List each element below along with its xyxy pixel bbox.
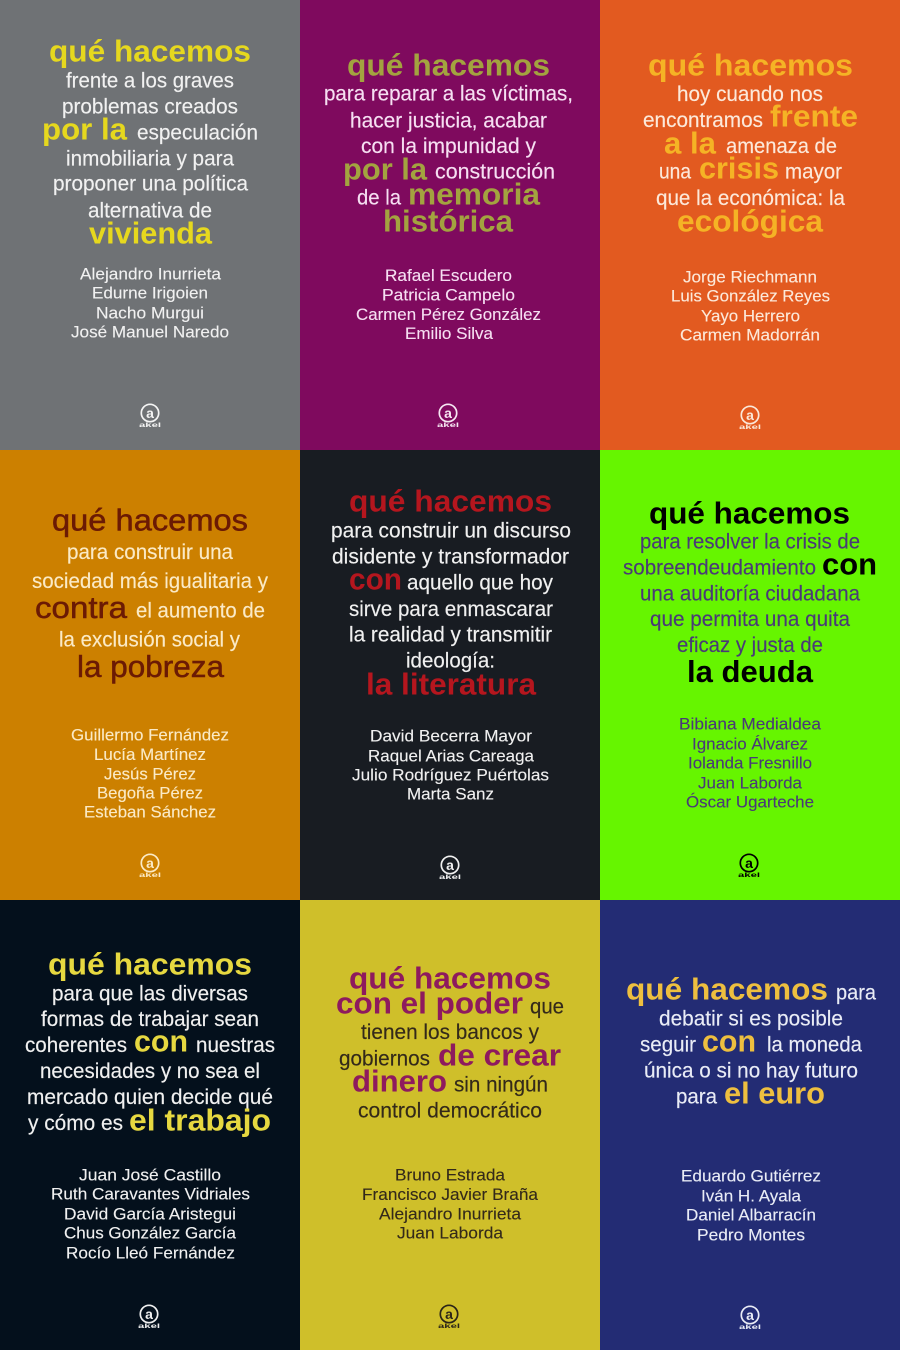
headline: qué hacemos frente a la crisis ecológica: una — [659, 161, 691, 184]
headline: qué hacemos contra la pobreza: qué hacemos — [52, 503, 248, 538]
authors: Guillermo Fernández — [71, 726, 229, 744]
authors: Rocío Lleó Fernández — [66, 1244, 235, 1262]
headline: qué hacemos por la vivienda: inmobiliaria y para — [66, 148, 234, 171]
headline: qué hacemos por la vivienda: proponer una política — [53, 173, 248, 196]
headline: qué hacemos con el trabajo: mercado quien decide qué — [27, 1086, 273, 1109]
headline: qué hacemos por la memoria histórica: construcción — [435, 161, 555, 184]
icon: akel logo: a — [146, 405, 154, 421]
headline: qué hacemos frente a la crisis ecológica — [643, 48, 858, 239]
headline: qué hacemos con la deuda: qué hacemos — [649, 496, 850, 531]
authors: Juan Laborda — [397, 1224, 504, 1242]
headline: qué hacemos por la memoria histórica: por la — [343, 152, 428, 187]
headline: qué hacemos con la deuda: eficaz y justa de — [677, 634, 823, 657]
panel: literatura cover — [300, 450, 600, 900]
headline: qué hacemos con el poder de crear dinero: de crear — [438, 1038, 561, 1073]
panel: euro cover — [600, 900, 900, 1350]
authors: Francisco Javier Braña — [362, 1186, 539, 1204]
headline: qué hacemos con el euro — [626, 972, 876, 1111]
authors: Rafael Escudero — [385, 267, 512, 285]
headline: qué hacemos frente a la crisis ecológica: que la económica: la — [656, 187, 845, 210]
headline: qué hacemos con la literatura: ideología: — [406, 650, 495, 673]
headline: qué hacemos frente a la crisis ecológica: encontramos — [643, 109, 763, 132]
authors: Pedro Montes — [697, 1226, 805, 1244]
headline: qué hacemos con el poder de crear dinero: qué hacemos — [349, 961, 551, 996]
authors: Edurne Irigoien — [92, 284, 208, 302]
headline: qué hacemos con el trabajo: el trabajo — [129, 1103, 271, 1138]
icon: akel logo — [739, 1306, 762, 1331]
headline: qué hacemos por la memoria histórica — [324, 48, 573, 239]
authors: Raquel Arias Careaga — [368, 747, 535, 765]
authors — [671, 268, 830, 344]
headline: qué hacemos frente a la crisis ecológica: qué hacemos — [648, 48, 853, 83]
headline: qué hacemos con el trabajo: y cómo es — [28, 1112, 123, 1135]
headline: qué hacemos contra la pobreza: para construir una — [67, 541, 233, 564]
headline: qué hacemos con el trabajo: con — [134, 1024, 188, 1059]
headline: qué hacemos con el trabajo: formas de trabajar sean — [41, 1008, 259, 1031]
headline: qué hacemos por la vivienda: qué hacemos — [49, 34, 251, 69]
headline: qué hacemos con el trabajo: necesidades y no sea el — [40, 1060, 260, 1083]
headline: qué hacemos con el poder de crear dinero: gobiernos — [339, 1048, 430, 1071]
headline: qué hacemos contra la pobreza: sociedad más igualitaria y — [32, 570, 268, 593]
icon: akel logo — [437, 404, 460, 429]
headline: qué hacemos con el euro: con — [702, 1024, 756, 1059]
icon: akel logo: akel — [739, 425, 762, 431]
headline: qué hacemos con el euro: debatir si es posible — [659, 1008, 843, 1031]
headline: qué hacemos contra la pobreza: contra — [35, 590, 128, 625]
authors: Esteban Sánchez — [84, 803, 216, 821]
icon: akel logo — [139, 404, 162, 429]
authors: Luis González Reyes — [671, 287, 830, 305]
icon: akel logo: akel — [438, 1324, 461, 1330]
headline: qué hacemos con el trabajo: para que las diversas — [52, 983, 248, 1006]
headline: qué hacemos por la memoria histórica: histórica — [383, 204, 514, 239]
panel: memoria histórica cover — [300, 0, 600, 450]
headline: qué hacemos con el poder de crear dinero: con el poder — [336, 986, 523, 1021]
headline: qué hacemos con el euro: única o si no hay futuro — [644, 1060, 858, 1083]
headline: qué hacemos por la vivienda: alternativa de — [88, 200, 212, 223]
headline: qué hacemos con el trabajo — [25, 947, 275, 1138]
headline: qué hacemos por la vivienda — [42, 34, 258, 251]
headline: qué hacemos frente a la crisis ecológica: amenaza de — [726, 135, 837, 158]
headline: qué hacemos frente a la crisis ecológica: a la — [664, 126, 717, 161]
headline: qué hacemos con la literatura — [331, 484, 571, 702]
icon: akel logo: a — [746, 407, 754, 423]
headline: qué hacemos con el euro: la moneda — [767, 1034, 862, 1057]
icon: akel logo — [739, 406, 762, 431]
headline: qué hacemos con la deuda: sobreendeudamiento — [623, 557, 816, 580]
headline: qué hacemos frente a la crisis ecológica: hoy cuando nos — [677, 83, 823, 106]
authors: Patricia Campelo — [382, 286, 515, 304]
headline: qué hacemos por la memoria histórica: de la — [357, 187, 401, 210]
icon: akel logo — [439, 856, 462, 881]
headline: qué hacemos con el trabajo: nuestras — [196, 1034, 275, 1057]
authors: Jorge Riechmann — [683, 268, 817, 286]
authors: David Becerra Mayor — [370, 727, 533, 745]
headline: qué hacemos con la deuda: la deuda — [687, 654, 814, 689]
panel: poder bancario cover — [300, 900, 600, 1350]
icon: akel logo: akel — [437, 423, 460, 429]
authors: Iván H. Ayala — [701, 1187, 802, 1205]
headline: qué hacemos con la literatura: con — [349, 562, 402, 597]
headline: qué hacemos con el poder de crear dinero: tienen los bancos y — [361, 1021, 539, 1044]
authors: Eduardo Gutiérrez — [681, 1167, 821, 1185]
headline: qué hacemos por la memoria histórica: qué hacemos — [347, 48, 550, 83]
panel: deuda cover — [600, 450, 900, 900]
headline: qué hacemos con el euro: el euro — [724, 1076, 825, 1111]
headline: qué hacemos por la memoria histórica: con la impunidad y — [361, 135, 536, 158]
headline: qué hacemos con la literatura: qué hacemos — [349, 484, 552, 519]
headline: qué hacemos por la vivienda: frente a los graves — [66, 70, 234, 93]
icon: akel logo: a — [446, 857, 454, 873]
headline: qué hacemos con la literatura: la literatura — [366, 667, 537, 702]
authors: Carmen Madorrán — [680, 326, 820, 344]
headline: qué hacemos con el trabajo: qué hacemos — [48, 947, 252, 982]
icon: akel logo — [139, 854, 162, 879]
headline: qué hacemos frente a la crisis ecológica: frente — [770, 99, 858, 134]
icon: akel logo: a — [444, 405, 452, 421]
headline: qué hacemos con el poder de crear dinero: que — [530, 996, 564, 1019]
panel: pobreza cover — [0, 450, 300, 900]
icon: akel logo: akel — [139, 873, 162, 879]
icon: akel logo: a — [145, 1306, 153, 1322]
headline: qué hacemos por la vivienda: por la — [42, 112, 128, 147]
headline: qué hacemos con el euro: para — [676, 1086, 717, 1109]
headline: qué hacemos contra la pobreza: la pobreza — [77, 649, 225, 684]
headline: qué hacemos por la memoria histórica: hacer justicia, acabar — [350, 110, 547, 133]
authors: Marta Sanz — [407, 785, 494, 803]
icon: akel logo: akel — [739, 1325, 762, 1331]
headline: qué hacemos con el euro: qué hacemos — [626, 972, 828, 1007]
headline: qué hacemos contra la pobreza: el aumento de — [136, 600, 265, 623]
headline: qué hacemos con la literatura: sirve para enmascarar — [349, 598, 553, 621]
headline: qué hacemos con el euro: seguir — [640, 1034, 696, 1057]
authors: Yayo Herrero — [701, 307, 800, 325]
headline: qué hacemos contra la pobreza: la exclusión social y — [59, 629, 240, 652]
authors: Julio Rodríguez Puértolas — [352, 766, 549, 784]
authors: Carmen Pérez González — [356, 306, 541, 324]
headline: qué hacemos por la vivienda: vivienda — [89, 216, 213, 251]
authors: Iolanda Fresnillo — [688, 754, 812, 772]
panel: trabajo cover — [0, 900, 300, 1350]
authors: Jesús Pérez — [104, 765, 196, 783]
headline: qué hacemos con la literatura: aquello que hoy — [407, 572, 553, 595]
headline: qué hacemos con la deuda — [623, 496, 877, 689]
headline: qué hacemos con la literatura: disidente y transformador — [332, 546, 569, 569]
authors: Nacho Murgui — [96, 304, 204, 322]
headline: qué hacemos con el poder de crear dinero: sin ningún — [454, 1074, 548, 1097]
authors: Lucía Martínez — [94, 746, 206, 764]
authors: David García Aristegui — [64, 1205, 236, 1223]
headline: qué hacemos con el poder de crear dinero — [336, 961, 564, 1123]
headline: qué hacemos con la deuda: que permita una quita — [650, 608, 850, 631]
authors — [71, 265, 229, 341]
headline: qué hacemos por la memoria histórica: para reparar a las víctimas, — [324, 83, 573, 106]
authors: Juan José Castillo — [79, 1166, 221, 1184]
headline: qué hacemos con el poder de crear dinero: control democrático — [358, 1100, 542, 1123]
headline: qué hacemos por la vivienda: problemas creados — [62, 96, 238, 119]
authors: Ruth Caravantes Vidriales — [51, 1185, 250, 1203]
headline: qué hacemos con la deuda: con — [822, 547, 877, 582]
headline: qué hacemos con la literatura: para construir un discurso — [331, 520, 571, 543]
headline: qué hacemos por la memoria histórica: memoria — [408, 177, 541, 212]
authors — [352, 727, 549, 803]
authors: Alejandro Inurrieta — [379, 1205, 522, 1223]
authors: Ignacio Álvarez — [692, 734, 808, 753]
headline: qué hacemos contra la pobreza — [32, 503, 268, 684]
icon: akel logo: a — [445, 1306, 453, 1322]
authors: Bibiana Medialdea — [679, 715, 822, 733]
icon: akel logo — [438, 1305, 461, 1330]
icon: akel logo: akel — [439, 875, 462, 881]
authors: Begoña Pérez — [97, 784, 203, 802]
panel: vivienda cover — [0, 0, 300, 450]
panel: crisis ecológica cover — [600, 0, 900, 450]
icon: akel logo: akel — [738, 873, 761, 879]
authors: Chus González García — [64, 1224, 237, 1242]
headline: qué hacemos con el poder de crear dinero: dinero — [352, 1064, 447, 1099]
icon: akel logo: a — [746, 1307, 754, 1323]
authors: José Manuel Naredo — [71, 323, 229, 341]
icon: akel logo — [738, 854, 761, 879]
authors — [51, 1166, 250, 1262]
authors: Emilio Silva — [405, 325, 494, 343]
authors — [71, 726, 229, 821]
headline: qué hacemos por la vivienda: especulación — [137, 122, 258, 145]
headline: qué hacemos con la deuda: para resolver la crisis de — [640, 531, 860, 554]
icon: akel logo: akel — [139, 423, 162, 429]
authors: Bruno Estrada — [395, 1166, 506, 1184]
headline: qué hacemos frente a la crisis ecológica: mayor — [785, 161, 842, 184]
headline: qué hacemos con el euro: para — [836, 982, 876, 1005]
authors — [362, 1166, 539, 1242]
icon: akel logo — [138, 1305, 161, 1330]
authors: Óscar Ugarteche — [686, 792, 814, 811]
icon: akel logo: a — [745, 855, 753, 871]
authors — [681, 1167, 821, 1244]
authors: Daniel Albarracín — [686, 1206, 816, 1224]
authors: Juan Laborda — [698, 774, 803, 792]
icon: akel logo: akel — [138, 1324, 161, 1330]
headline: qué hacemos frente a la crisis ecológica: crisis — [699, 151, 779, 186]
authors — [356, 267, 541, 343]
headline: qué hacemos frente a la crisis ecológica: ecológica — [677, 204, 824, 239]
icon: akel logo: a — [146, 855, 154, 871]
headline: qué hacemos con la literatura: la realidad y transmitir — [349, 624, 552, 647]
authors: Alejandro Inurrieta — [80, 265, 222, 283]
headline: qué hacemos con el trabajo: coherentes — [25, 1034, 127, 1057]
authors — [679, 715, 822, 811]
headline: qué hacemos con la deuda: una auditoría ciudadana — [640, 583, 860, 606]
